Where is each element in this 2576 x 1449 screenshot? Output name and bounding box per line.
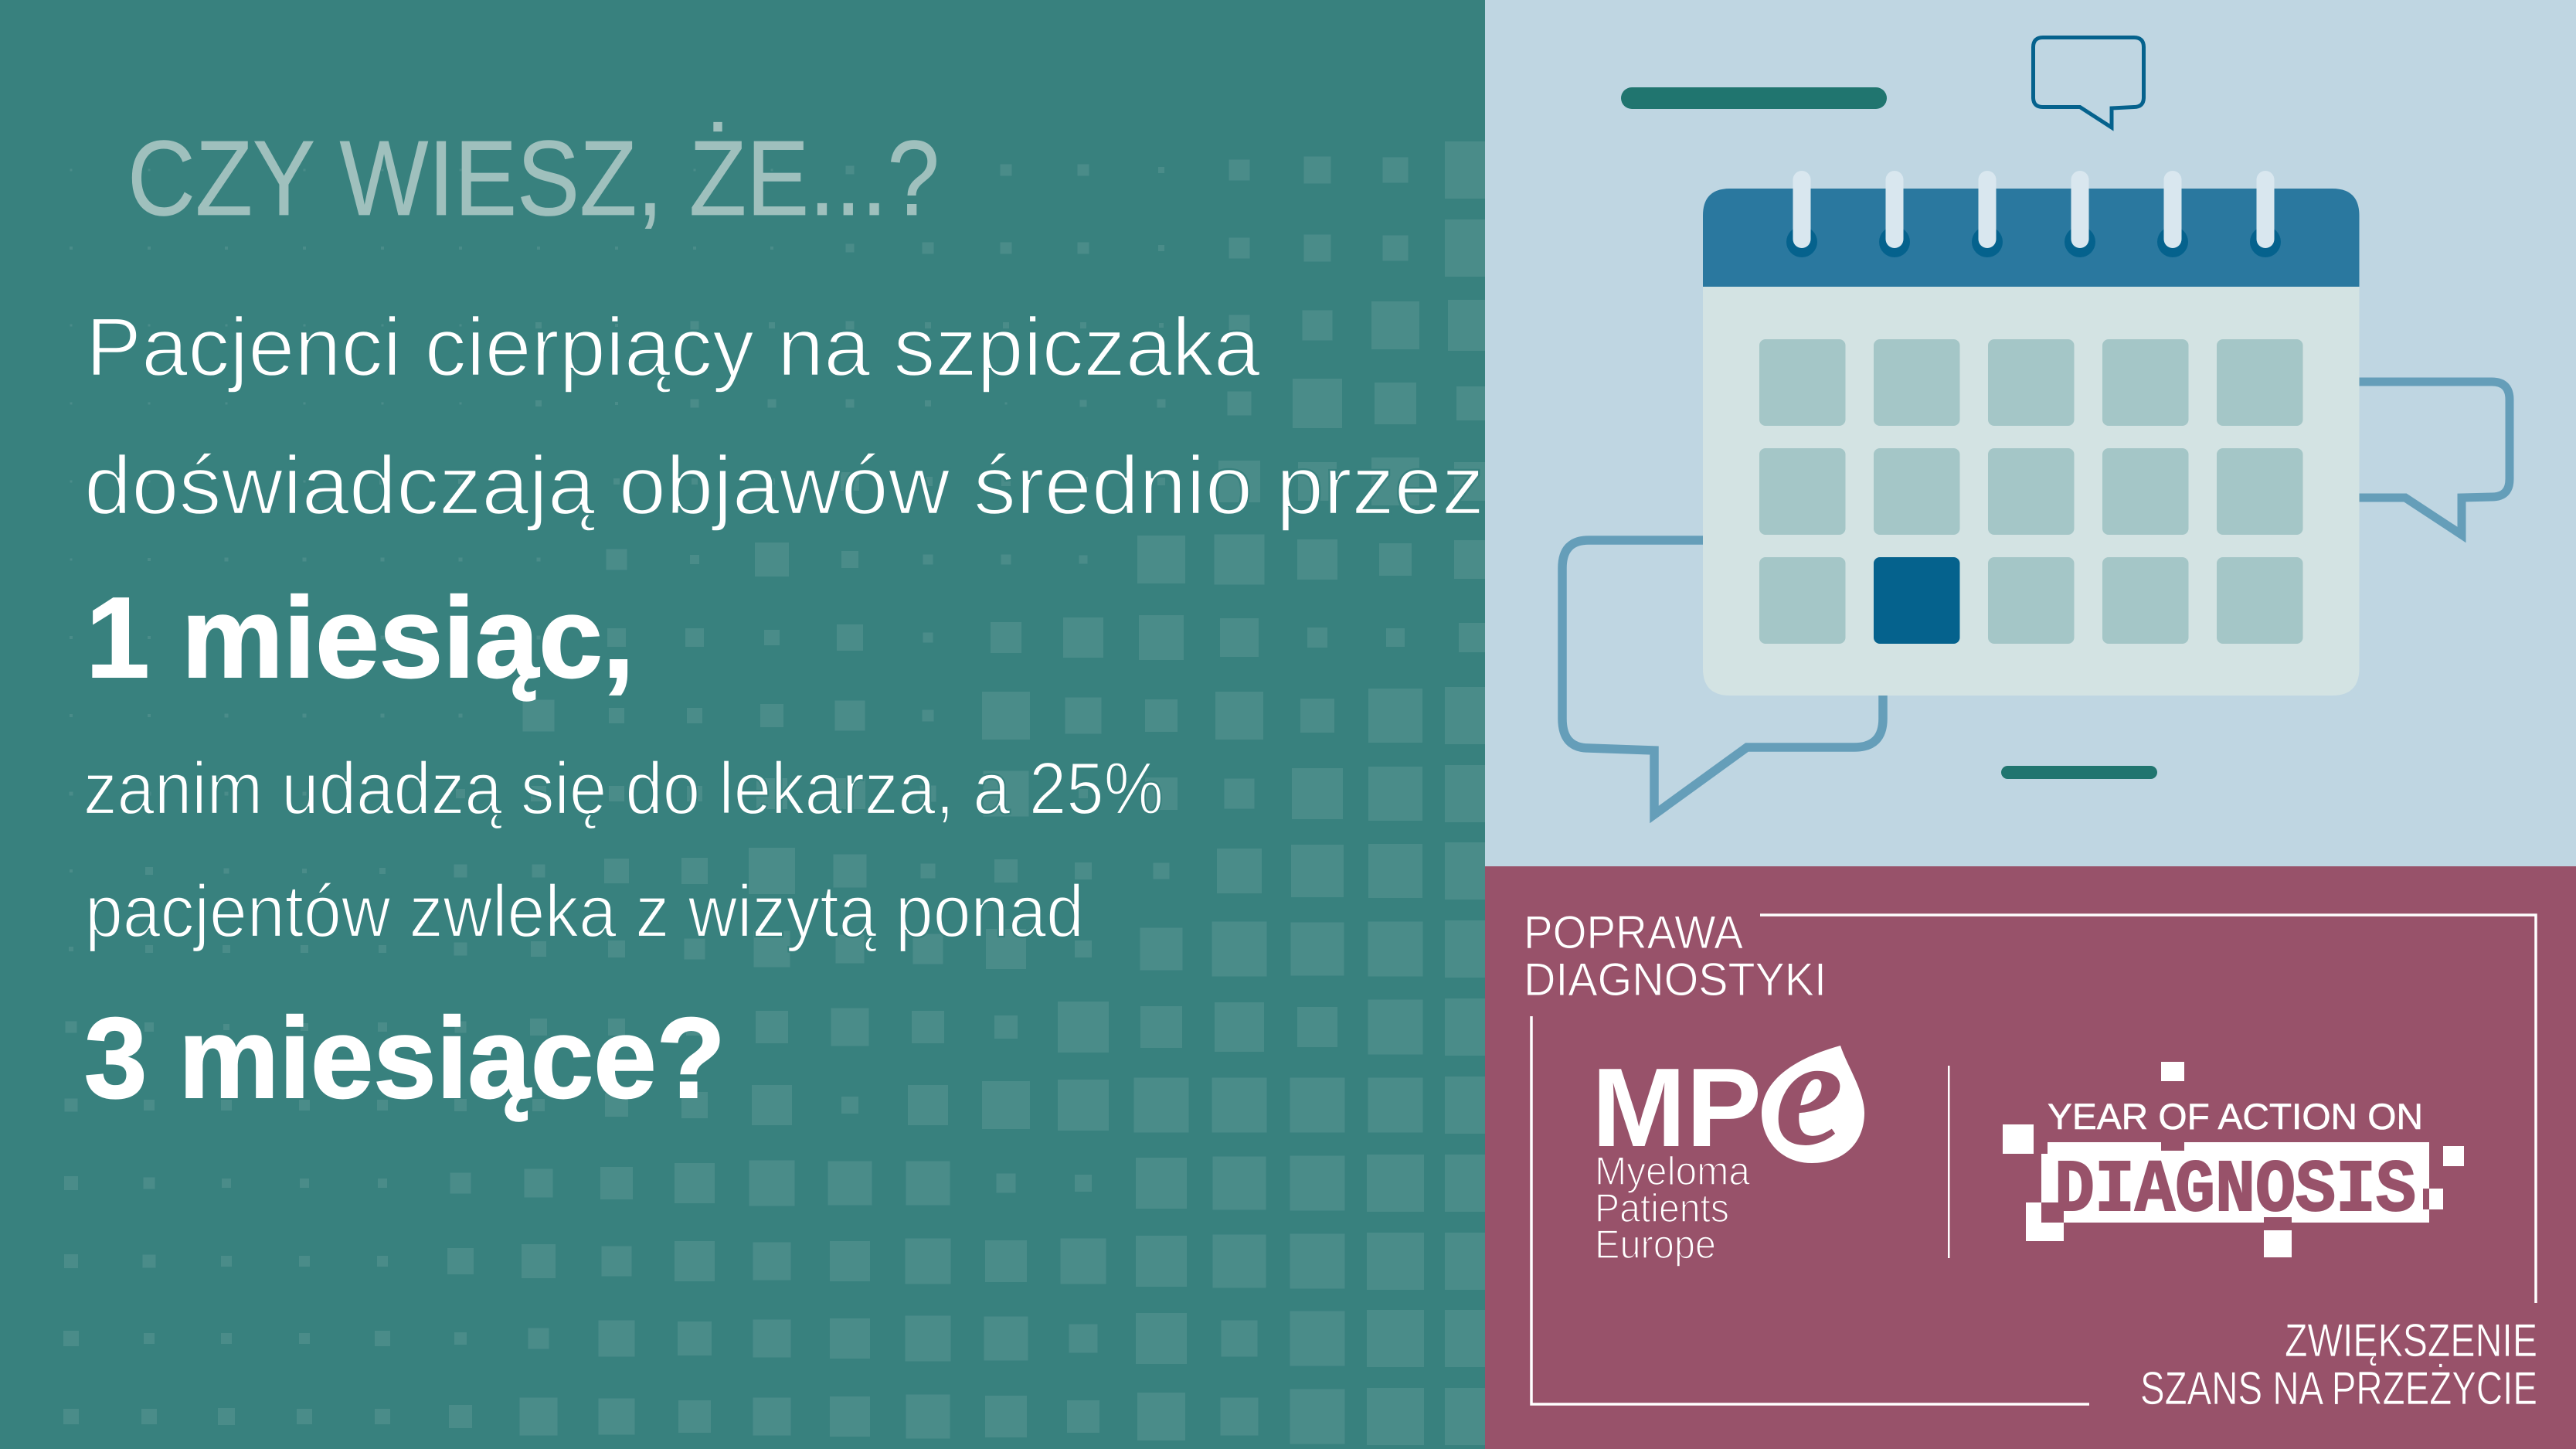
calendar binding rings <box>1793 171 2275 248</box>
icon: right speech bubble <box>2357 382 2510 535</box>
panel: logos and slogans <box>1485 866 2576 1449</box>
text block: doctor delay statement: zanim udadzą się do lekarza, a 25% <box>83 747 1164 830</box>
frame: bottom left corner lines <box>1531 1016 2089 1404</box>
highlight: 1 miesiąc: 1 miesiąc, <box>86 574 634 702</box>
text block: Poprawa diagnostyki: POPRAWA <box>1524 906 1743 958</box>
logo drop <box>1762 1046 1864 1163</box>
panel: calendar illustration <box>1485 0 2576 866</box>
text block: symptoms statement: Pacjenci cierpiący na szpiczaka <box>86 300 1261 393</box>
text block: Zwiększenie szans na przeżycie <box>2140 1315 2537 1414</box>
logo line: Year of action on: YEAR OF ACTION ON <box>2048 1096 2423 1137</box>
logo white band <box>2041 1142 2429 1223</box>
text block: symptoms statement: doświadczają objawów średnio przez <box>84 438 1484 532</box>
logo wordmark: Europe <box>1595 1223 1716 1267</box>
text block: doctor delay statement <box>83 747 1164 953</box>
text block: symptoms statement <box>84 300 1484 532</box>
calendar highlighted day <box>1874 557 1959 644</box>
logo word: Diagnosis: DIAGNOSIS <box>2054 1148 2416 1233</box>
highlight: 3 miesiące: 3 miesiące? <box>84 995 726 1122</box>
calendar binding holes <box>1786 226 2281 257</box>
calendar header <box>1703 189 2360 287</box>
decorative bar: top green <box>1621 87 1887 109</box>
logo wordmark: Myeloma <box>1595 1149 1750 1194</box>
icon: left speech bubble <box>1562 540 1883 815</box>
logo: Myeloma Patients Europe <box>1592 1007 1864 1267</box>
text block: Poprawa diagnostyki: DIAGNOSTYKI <box>1524 954 1827 1005</box>
text block: Poprawa diagnostyki <box>1524 906 1827 1005</box>
frame: top right corner lines <box>1760 915 2536 1303</box>
heading: Czy wiesz, że: CZY WIESZ, ŻE...? <box>127 119 940 238</box>
calendar day cells <box>1759 339 2302 644</box>
logo pixel squares <box>2003 1062 2464 1257</box>
calendar body <box>1703 287 2360 696</box>
decorative bar: lower green <box>2001 766 2157 779</box>
background pattern of squares <box>71 170 1473 1417</box>
logo letters MP: MP <box>1592 1045 1762 1170</box>
panel: left teal background with text <box>0 0 1487 1449</box>
divider between logos <box>1948 1066 1950 1258</box>
icon: small speech bubble <box>2034 37 2143 128</box>
logo wordmark: Patients <box>1595 1186 1729 1231</box>
logo pixel notches <box>2041 1142 2429 1223</box>
logo letter e: e <box>1775 1007 1844 1178</box>
logo: Year of Action on Diagnosis <box>2003 1062 2464 1257</box>
logo wordmark <box>1595 1149 1750 1267</box>
icon: calendar <box>1703 171 2360 696</box>
text block: doctor delay statement: pacjentów zwleka z wizytą ponad <box>85 870 1084 953</box>
